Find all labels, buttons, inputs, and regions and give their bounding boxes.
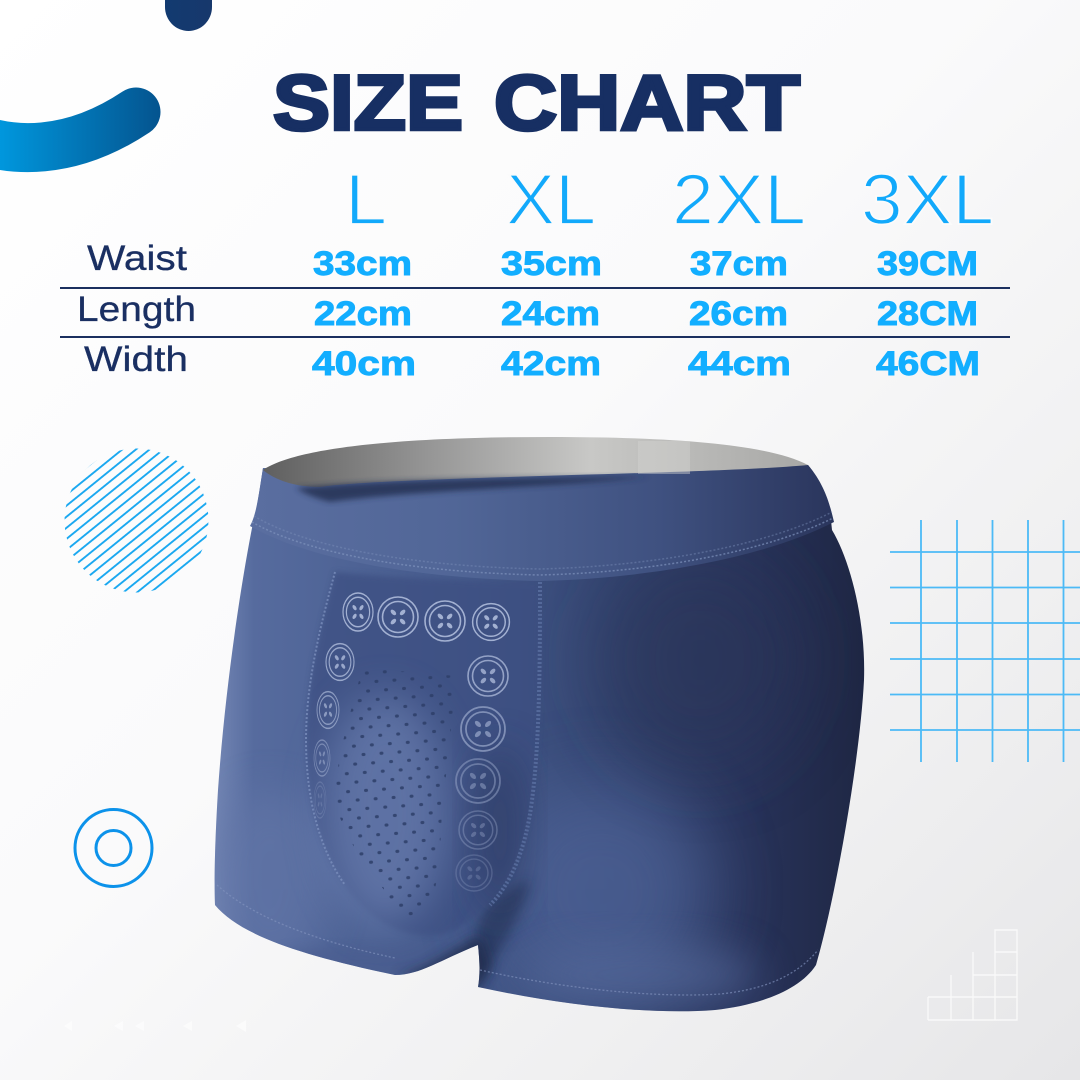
measurement values: 46CM (876, 345, 980, 383)
measurement values: 24cm (501, 295, 600, 333)
row labels (77, 239, 196, 379)
seam stitching (306, 572, 540, 905)
measurement values: 22cm (314, 295, 412, 333)
size headers: XL (506, 161, 596, 240)
fabric shading (214, 572, 763, 1012)
size headers: 2XL (672, 161, 806, 240)
pouch highlight (323, 695, 447, 925)
measurement values: 40cm (312, 345, 416, 383)
waistband (250, 465, 834, 581)
decoration: faint white arrows (64, 1020, 246, 1032)
decoration: blue swoosh (0, 112, 136, 148)
measurement values: 44cm (688, 345, 791, 383)
pouch shadow (476, 745, 524, 915)
decoration: navy pill (165, 0, 212, 31)
title: CHART (494, 58, 800, 146)
measurement values: 33cm (313, 245, 412, 283)
title: SIZE (273, 58, 463, 146)
garment body (215, 465, 864, 1011)
row labels: Width (84, 340, 188, 379)
measurement values: 39CM (877, 245, 978, 283)
decoration: blue grid (890, 520, 1080, 762)
magnetic buttons (314, 593, 509, 891)
size chart table (60, 161, 1010, 383)
measurement values: 28CM (877, 295, 978, 333)
size headers (345, 161, 994, 240)
perforated mesh dots (335, 668, 456, 920)
pouch panel (306, 572, 477, 934)
product: blue boxer briefs (210, 437, 864, 1011)
decoration: concentric target (75, 810, 152, 886)
title (273, 58, 800, 146)
row divider lines (60, 288, 1010, 337)
measurement values: 35cm (501, 245, 602, 283)
waistband inner grey lining (263, 437, 808, 487)
measurement values: 42cm (501, 345, 601, 383)
waistband stitching (252, 512, 833, 575)
measurement values: 26cm (689, 295, 788, 333)
measurement values: 37cm (690, 245, 788, 283)
size headers: L (345, 161, 387, 240)
row labels: Length (77, 290, 196, 329)
size headers: 3XL (861, 161, 994, 240)
inner dark band shadow (296, 477, 650, 502)
decoration: white stair grid (928, 930, 1017, 1020)
measurement values (312, 245, 980, 383)
decoration: hatched circle (64, 448, 208, 592)
row labels: Waist (87, 239, 187, 278)
hem stitching (217, 885, 818, 995)
inner label patch (638, 441, 690, 474)
